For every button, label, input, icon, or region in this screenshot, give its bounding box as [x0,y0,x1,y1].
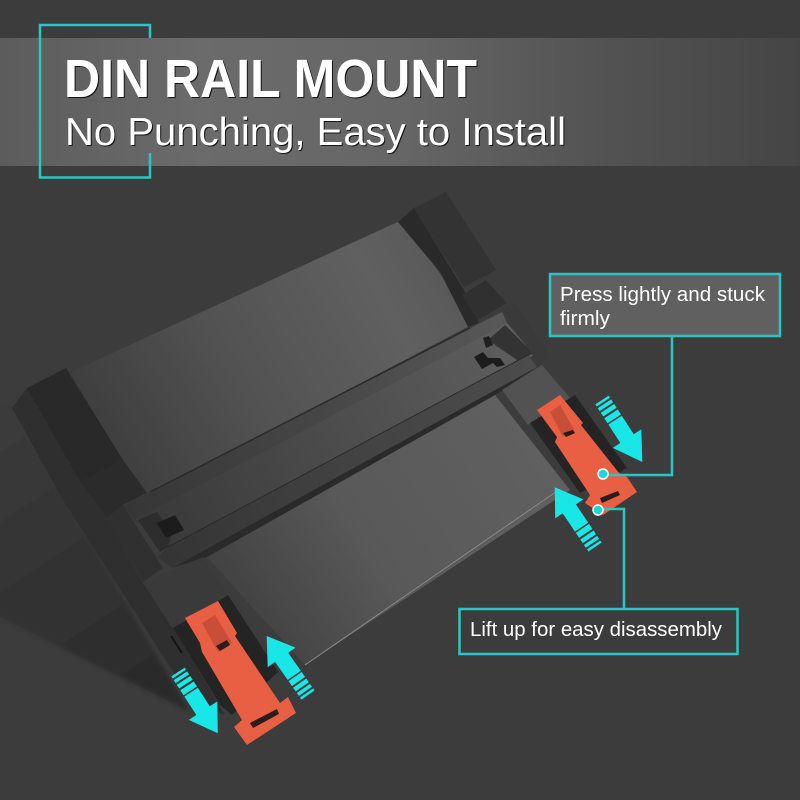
marker dot: press [598,469,608,479]
device shadow [0,400,190,712]
right latch [530,395,637,515]
title frame [40,25,150,178]
subtitle: No Punching, Easy to Install [65,111,566,154]
title: DIN RAIL MOUNT [64,49,477,109]
rail end left [107,505,163,582]
arrow: left latch up [253,626,322,705]
callout: press lightly: Press lightly and stuck [560,284,766,306]
rail end right [502,302,550,363]
arrow: right latch up [541,478,609,557]
rail recess right [488,325,533,362]
marker dot: lift [593,505,603,515]
latch frame [173,595,278,715]
leader line: press [603,336,672,475]
left block [27,368,123,482]
latch frame [530,395,627,493]
callout: press lightly: firmly [560,308,610,330]
mounting block left [143,557,227,628]
rail shadow band [172,367,537,568]
mounting block right [502,365,570,425]
arrow: left latch down [164,663,232,742]
latch slot [600,491,620,503]
leader line: lift [598,509,624,609]
red latch body [537,395,637,515]
upper rail [123,312,507,520]
lower plate [207,395,570,665]
left latch [173,595,296,745]
device body [12,388,225,715]
din rail module [12,192,570,715]
rail recess left [138,512,172,552]
latch slot [250,709,279,728]
latch window [550,405,574,437]
rail channel [134,323,534,547]
side slit [171,636,182,653]
arrow: right latch down [588,391,657,471]
plate end shadow [398,208,479,327]
top right block [414,192,496,287]
callout: lift up: Lift up for easy disassembly [470,619,722,641]
upper plate [71,220,475,500]
lower rail [158,355,537,568]
header band [0,38,800,166]
latch window [202,615,232,652]
callout: lift up [460,609,738,654]
callout: press lightly [550,274,780,336]
red latch body [185,601,296,745]
